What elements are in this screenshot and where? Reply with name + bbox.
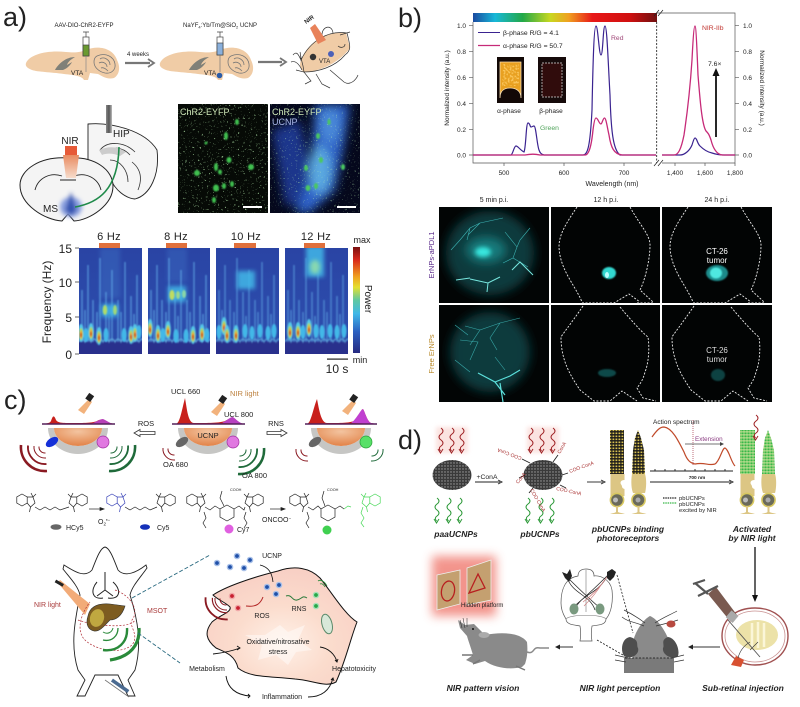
spectrum bar (473, 13, 657, 22)
chemical structures (17, 491, 380, 528)
spectrum (42, 416, 115, 424)
pbUCNP particle (496, 427, 595, 539)
product structure (290, 491, 351, 528)
label: NaYF4: 4 (198, 24, 201, 30)
axis titles: Wavelength (nm) (585, 181, 639, 188)
colour bar labels (353, 235, 373, 365)
spectrum (305, 399, 377, 424)
scale bar (243, 206, 262, 208)
label: pbUCNPs binding (591, 524, 665, 534)
legend: pbUCNPs (679, 496, 705, 502)
tick labels: 600 (559, 170, 570, 177)
axes (469, 10, 739, 166)
labels: NIR light (230, 389, 260, 398)
arrow to pattern vision (555, 644, 573, 650)
emission chart (444, 10, 765, 188)
syringe at tail (105, 679, 129, 697)
frequency labels: 12 Hz (301, 231, 331, 243)
curve: beta phase (473, 26, 735, 155)
UCNP dots outside (214, 553, 253, 571)
sagittal brain two: VTA (204, 70, 217, 77)
liver (87, 604, 125, 631)
labels: OA 800 (242, 471, 267, 480)
UCNP label: UCNP (262, 553, 282, 560)
inset: alpha phase: α-phase (497, 108, 521, 115)
mouse with NIR (291, 14, 358, 88)
scale bar (337, 206, 356, 208)
curve: alpha phase (473, 26, 735, 155)
tick labels: 500 (499, 170, 510, 177)
green signal small (371, 449, 383, 461)
pbUCNP particle: COO·ConA (528, 488, 547, 514)
photoreceptors activated (728, 415, 777, 543)
chemical labels: − (288, 516, 291, 521)
RNS arrow (286, 596, 307, 600)
green signal (238, 448, 264, 474)
arrow to perception (688, 644, 720, 650)
row label: ErNPs-aPDL1: ErNPs-aPDL1 (427, 231, 436, 279)
y axis (40, 242, 79, 362)
stress label (246, 639, 310, 656)
column headers: 12 h p.i. (594, 197, 619, 204)
spectrum (172, 398, 245, 424)
tick labels: 0.8 (457, 49, 466, 56)
cell body (207, 568, 357, 684)
red signal (206, 597, 228, 619)
NIR label: NIR light (34, 602, 61, 609)
labels: UCL 660 (171, 387, 200, 396)
label: Hidden platform (461, 603, 503, 609)
nanoprobe central (163, 387, 267, 480)
mouse (447, 618, 549, 693)
mouse outline (63, 547, 147, 696)
label: Sub-retinal injection (702, 683, 784, 693)
mouse with NIR: NIR (304, 14, 316, 26)
UCNP entry arrow (260, 565, 273, 582)
red signal small (163, 448, 175, 460)
axis titles: Normalized intensity (a.u.) (444, 50, 451, 126)
mouse anatomy (34, 547, 168, 697)
green RNS dots (313, 592, 319, 609)
y axis: 15 (59, 242, 72, 256)
action spectrum chart: Action spectrum (653, 419, 700, 426)
break line (656, 22, 658, 163)
chemical labels: COOH (327, 488, 339, 492)
image: free 24 h: CT-26 (706, 346, 728, 355)
MS glow (60, 192, 82, 217)
image: targeted 12 h (551, 207, 660, 303)
image: free 12 h (551, 305, 660, 402)
arrow: 4 weeks (125, 52, 154, 67)
image: targeted 24 h (662, 207, 772, 303)
laser head (55, 580, 64, 587)
coronal brain schematic (20, 105, 158, 221)
paaUCNP particle (432, 427, 478, 539)
label: Red: Red (611, 35, 624, 42)
hepatotoxicity label: Hepatotoxicity (332, 666, 376, 673)
chemical labels: COOH (230, 488, 242, 492)
frequency labels: 8 Hz (164, 231, 188, 243)
time scale bar: 10 s (326, 362, 348, 376)
red ROS dots (229, 593, 241, 611)
labels: OA 680 (163, 460, 188, 469)
HCy5 structure (17, 493, 87, 512)
inset: alpha phase (497, 57, 524, 115)
tick labels: 0.4 (457, 101, 466, 108)
small green signal (318, 580, 327, 587)
arrow: ROS: ROS (138, 419, 154, 428)
pattern screens (432, 556, 503, 616)
spectrogram: 10 Hz (216, 248, 282, 354)
NIR beam (63, 146, 79, 178)
arrow: RNS (267, 419, 287, 436)
axis titles: Normalized intensity (a.u.) (758, 50, 765, 126)
label: NIR pattern vision (447, 683, 519, 693)
y axis: 10 (59, 276, 72, 290)
arrow: ROS (134, 419, 155, 436)
UCNP dots inside (264, 582, 282, 597)
spectrogram: 6 Hz (78, 248, 145, 354)
hemisphere (178, 428, 238, 454)
reaction arrow two (270, 508, 285, 510)
tick labels (457, 23, 752, 177)
blob: green (360, 436, 372, 448)
heading: a): a) (3, 2, 27, 32)
long arrow to activated (650, 480, 733, 484)
Cy5 structure (107, 493, 175, 512)
label: NIR-IIb: NIR-IIb (702, 25, 724, 32)
arrow: +ConA: +ConA (477, 474, 498, 481)
label: by NIR light (728, 533, 777, 543)
arrow: fold increase: 7.6× (708, 61, 721, 68)
hemisphere (48, 428, 108, 454)
label: Green: Green (540, 125, 559, 132)
label: NaYF4: :Yb/Tm@SiO (201, 23, 236, 29)
red signal (21, 445, 47, 471)
legend: excited by NIR (679, 508, 717, 514)
metabolism label: Metabolism (189, 666, 225, 673)
arrow to mouse (258, 58, 286, 66)
labels (163, 387, 267, 480)
UCNP spot (217, 73, 222, 78)
photoreceptors binding (591, 430, 665, 543)
cell diagram (189, 553, 376, 701)
column headers (480, 197, 730, 204)
frequency labels: 6 Hz (97, 231, 121, 243)
green intestine arcs (103, 628, 139, 660)
image: targeted 24 h: tumor (707, 256, 728, 265)
chemical labels: O (98, 519, 103, 526)
flashlight (342, 394, 358, 415)
mouse head top view (580, 610, 684, 693)
label: NaYF4: 2 (236, 24, 239, 30)
tick labels: 0.4 (743, 101, 752, 108)
label: paaUCNPs (433, 529, 478, 539)
frequency labels (97, 231, 331, 243)
arrow: 4 weeks: 4 weeks (127, 52, 149, 58)
ROS arrow (246, 597, 263, 606)
column headers: 24 h p.i. (705, 197, 730, 204)
NIR label: NIR (61, 136, 79, 147)
liver lobe highlight (88, 607, 106, 629)
image: targeted 5 min (439, 207, 549, 303)
flashlight (78, 393, 94, 414)
mitochondrion (320, 613, 334, 635)
label: NIR light perception (580, 683, 660, 693)
stress label: stress (269, 649, 288, 656)
action spectrum chart (650, 419, 735, 481)
label: pbUCNPs (519, 529, 560, 539)
RNS label: RNS (292, 606, 307, 613)
zoom lines (132, 555, 210, 663)
red signal small (296, 449, 308, 461)
pbUCNP particle: COO·ConA (496, 446, 523, 461)
spectrogram chart (40, 231, 373, 376)
arrow to photoreceptors (587, 480, 605, 484)
heading: d): d) (398, 425, 422, 455)
oval: HCy5 (174, 435, 190, 449)
eye injection (693, 580, 788, 693)
oval: Cy5 (44, 435, 60, 449)
legend: α-phase R/G = 50.7 (503, 43, 563, 50)
NIR beam (58, 580, 90, 615)
tick labels: 0.0 (457, 152, 466, 160)
MSOT label: MSOT (147, 608, 168, 615)
label: AAV: AAV-DIO-ChR2-EYFP (55, 23, 113, 29)
image: free 24 h: tumor (707, 355, 728, 364)
syringe green (83, 32, 89, 72)
label (591, 524, 665, 543)
blob: Cy7 (97, 436, 109, 448)
imaging grid (427, 197, 772, 402)
tick labels: 1,400 (667, 170, 684, 177)
sagittal brain one: VTA (71, 70, 84, 77)
ConA ligands (519, 455, 568, 493)
image: free 24 h (662, 305, 772, 402)
stress label: Oxidative/nitrosative (246, 639, 310, 646)
colour bar labels: Power (362, 285, 373, 314)
organ outline dashed (78, 590, 135, 650)
starburst stress (245, 625, 312, 665)
blob: Cy7 (227, 436, 239, 448)
label: NaYF4: UCNP (238, 23, 257, 29)
row label: Free ErNPs: Free ErNPs (427, 334, 436, 374)
heading: c): c) (4, 385, 26, 415)
spectrogram: 12 Hz (285, 246, 351, 354)
fragment green (361, 493, 380, 527)
colour bar (353, 247, 360, 353)
image: free 5 min (439, 305, 549, 402)
electrode (106, 105, 112, 133)
reaction arrow one (89, 508, 104, 510)
stimulation bars (99, 243, 325, 248)
action spectrum chart: 700 nm (689, 475, 705, 481)
tick labels: 0.6 (457, 75, 466, 82)
image: targeted 24 h: CT-26 (706, 247, 728, 256)
labels: UCL 800 (224, 410, 253, 419)
NIR wave (753, 415, 758, 440)
dashed guide lines (597, 575, 633, 655)
nanoprobe after RNS (296, 394, 383, 461)
chemical labels: Cy5 (157, 525, 170, 532)
label: NaYF4: NaYF (183, 23, 198, 29)
tick labels: 0.2 (457, 127, 466, 134)
chemical labels: •− (106, 518, 111, 522)
HIP label: HIP (113, 129, 130, 140)
labels (272, 107, 322, 127)
axis titles (444, 50, 765, 188)
projection (75, 147, 119, 207)
colour bar labels: max (353, 235, 371, 245)
heading: b): b) (398, 3, 422, 33)
micrograph: ChR2-EYFP + UCNP (270, 104, 360, 213)
y axis: 5 (65, 311, 72, 325)
green signal (109, 445, 135, 471)
legend: pbUCNPs (679, 502, 705, 508)
pbUCNP particle: COO·ConA (569, 460, 595, 475)
column headers: 5 min p.i. (480, 197, 508, 204)
nanoprobe after ROS (21, 393, 135, 471)
hemisphere (311, 428, 371, 454)
panel: c UCNP sensor (4, 385, 383, 701)
panel: a optogenetics (3, 2, 373, 376)
mouse with NIR: VTA (319, 59, 330, 65)
pbUCNP particle: ConA (515, 471, 528, 485)
legend (663, 496, 717, 514)
colour bar labels: min (353, 355, 367, 365)
y axis: 0 (65, 348, 72, 362)
UCNP injection brain (160, 23, 257, 80)
spectrogram: 8 Hz (147, 248, 214, 354)
tick labels: 1.0 (457, 23, 466, 30)
label (728, 524, 777, 543)
label: Activated (732, 524, 772, 534)
ROS label: ROS (254, 613, 270, 620)
chemical labels: 2 (103, 522, 106, 526)
chemical labels (50, 488, 339, 534)
tick labels: 1,600 (697, 170, 714, 177)
tick labels: 700 (619, 170, 630, 177)
tick labels: 1,800 (727, 170, 744, 177)
tick labels: 0.0 (743, 152, 752, 160)
arrow: RNS: RNS (268, 419, 284, 428)
label: photoreceptors (596, 533, 659, 543)
oval: HCy5 (307, 435, 323, 449)
tick labels: 1.0 (743, 23, 752, 30)
legend (478, 30, 563, 50)
chemical labels: HCy5 (66, 525, 84, 532)
label: ChR2-EYFP (180, 107, 230, 117)
legend: β-phase R/G = 4.1 (503, 30, 559, 37)
chemical labels: ONCOO (262, 517, 288, 524)
flashlight (211, 395, 227, 416)
action spectrum chart: Extension (695, 436, 723, 443)
pbUCNP particle: COO·ConA (556, 486, 582, 497)
micrograph: ChR2-EYFP (178, 104, 268, 213)
panel: b spectra and imaging (398, 3, 772, 402)
viral injection brain (26, 23, 119, 80)
tick labels: 0.2 (743, 127, 752, 134)
lungs (93, 572, 119, 598)
arrow down (752, 547, 758, 602)
syringe (693, 580, 760, 657)
tick labels: 0.6 (743, 75, 752, 82)
pathway arrows (213, 646, 338, 698)
inset: beta phase: β-phase (539, 108, 563, 115)
arrow: fold increase (708, 61, 721, 137)
frequency labels: 10 Hz (231, 231, 261, 243)
arrow: +ConA (475, 474, 502, 484)
chemical labels: Cy7 (237, 527, 250, 534)
y axis: Frequency (Hz) (40, 261, 54, 343)
tick labels: 0.8 (743, 49, 752, 56)
Cy7 structure (187, 491, 263, 528)
labels: ChR2-EYFP (272, 107, 322, 117)
labels: UCNP (197, 431, 219, 440)
inset: beta phase (538, 57, 566, 115)
panel: d vision restoration (398, 415, 788, 693)
pbUCNP particle: ConA (557, 441, 568, 455)
inflammation label: Inflammation (262, 694, 302, 701)
MS label: MS (43, 204, 58, 215)
syringe blue (217, 32, 223, 72)
labels: UCNP (272, 117, 298, 127)
brain top view (561, 569, 616, 641)
